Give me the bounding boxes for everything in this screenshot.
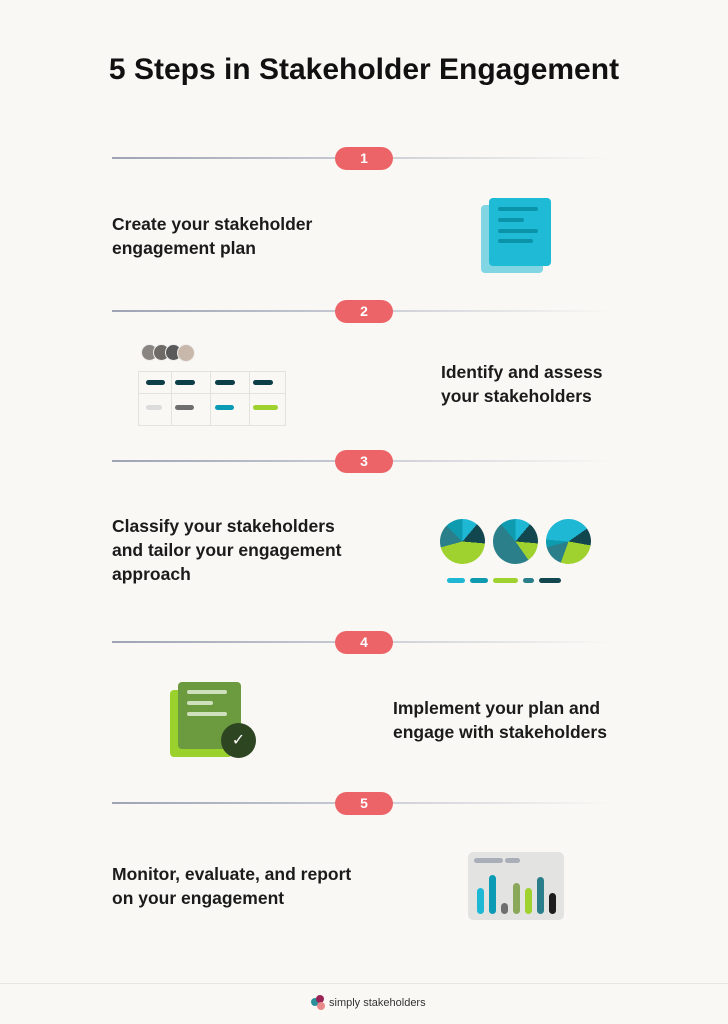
step 4 badge: 4 — [360, 634, 368, 650]
footer logo: simply stakeholders — [329, 997, 426, 1009]
icon: stakeholder table — [138, 344, 286, 426]
step 4 text: Implement your plan and — [393, 698, 600, 718]
step 1 badge: 1 — [360, 150, 368, 166]
step 1 text: engagement plan — [112, 238, 256, 258]
step 3 badge — [335, 450, 393, 473]
avatars — [141, 344, 195, 362]
step 4 text — [393, 698, 607, 742]
step 1 text — [112, 214, 312, 258]
footer logo — [311, 995, 426, 1010]
icon: approved document — [170, 682, 256, 758]
step 5 text: on your engagement — [112, 888, 284, 908]
title: 5 Steps in Stakeholder Engagement — [109, 53, 619, 86]
step 3 text: Classify your stakeholders — [112, 516, 335, 536]
step 1 text: Create your stakeholder — [112, 214, 312, 234]
step 5 badge — [335, 792, 393, 815]
step 3 text: and tailor your engagement — [112, 540, 341, 560]
step 5 badge: 5 — [360, 795, 368, 811]
chart: pies — [440, 519, 591, 583]
step 3 badge: 3 — [360, 453, 368, 469]
step 4 text: engage with stakeholders — [393, 722, 607, 742]
step 2 text — [441, 362, 602, 406]
step 2 text: Identify and assess — [441, 362, 602, 382]
step 3 text — [112, 516, 342, 584]
step 4 badge — [335, 631, 393, 654]
step 2 badge — [335, 300, 393, 323]
step 5 text — [112, 864, 351, 908]
icon: bar chart — [468, 852, 564, 920]
step 2 badge: 2 — [360, 303, 368, 319]
icon: approved document: ✓ — [232, 732, 245, 749]
step 1 badge — [335, 147, 393, 170]
icon: document — [481, 198, 551, 273]
step 2 text: your stakeholders — [441, 386, 592, 406]
step 5 text: Monitor, evaluate, and report — [112, 864, 351, 884]
step 3 text: approach — [112, 564, 191, 584]
